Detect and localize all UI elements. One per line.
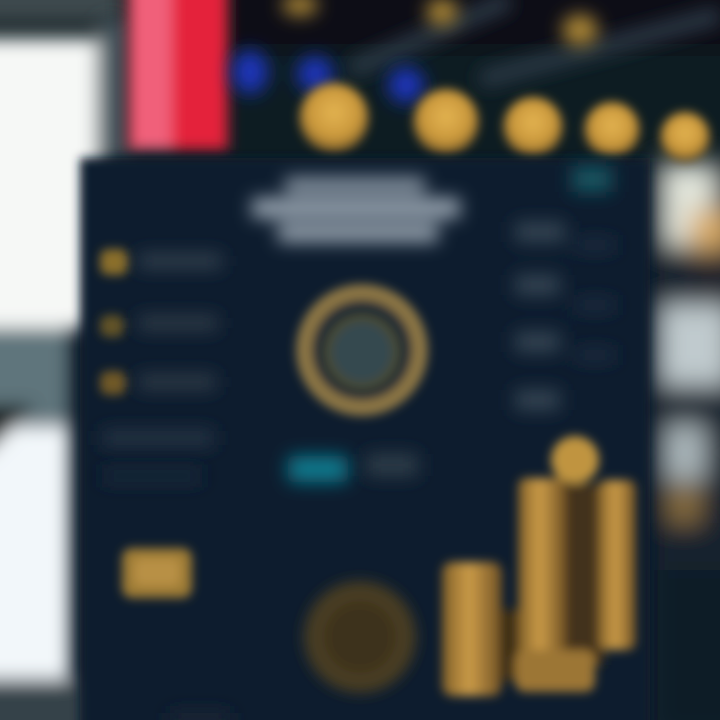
- bar chart: gold coin stacks: [442, 436, 636, 696]
- blue lights: [232, 50, 424, 103]
- teal corner badge: [572, 166, 612, 192]
- text block: list line two: [138, 316, 218, 330]
- stack base: [515, 650, 595, 692]
- row of gold coins: [299, 83, 710, 162]
- text block: list line three: [138, 375, 216, 389]
- text block: list line four: [102, 430, 214, 446]
- stack top: [551, 436, 599, 484]
- panel: left list: [100, 249, 222, 482]
- diagonal dark beams: [350, 0, 720, 80]
- icon: gold bar: [122, 548, 192, 598]
- red banner: [128, 0, 228, 150]
- tall stack dark core: [560, 485, 604, 665]
- icon: list bullet one: [100, 249, 128, 275]
- stack bridge: [500, 610, 520, 680]
- distant gold lights: [282, 0, 598, 46]
- panel: main dark board: [80, 158, 650, 720]
- text block: list line one: [138, 254, 222, 268]
- bottom edge shadow: [170, 712, 230, 720]
- heading: blurred title block: [252, 178, 460, 242]
- icon: dim lower coin: [304, 581, 416, 693]
- icon: list bullet three: [100, 371, 126, 395]
- teal button: [288, 456, 348, 482]
- panel: right list: [515, 222, 615, 410]
- tall stack right: [598, 480, 636, 650]
- text block: list line five: [102, 470, 202, 482]
- icon: list bullet two: [100, 315, 124, 337]
- short stack: [442, 562, 502, 696]
- background: dark upper scene: [0, 0, 720, 170]
- background: bright left window: [0, 20, 128, 720]
- icon: central coin: [304, 292, 420, 408]
- background: right edge scene: [650, 160, 720, 720]
- text block: label beside button: [366, 454, 418, 476]
- tall stack left: [518, 478, 566, 690]
